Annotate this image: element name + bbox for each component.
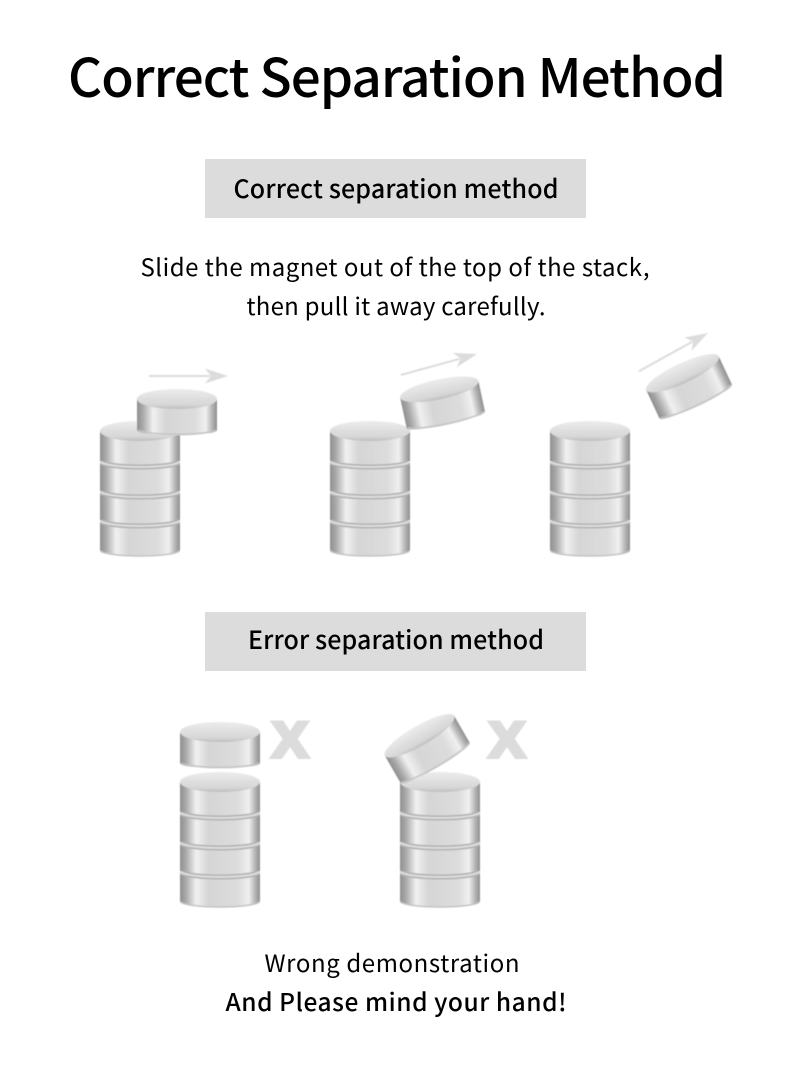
instruction text: then pull it away carefully. xyxy=(246,287,546,322)
error 1: magnet lifted straight up xyxy=(180,712,308,907)
footer text: Wrong demonstration xyxy=(264,944,520,979)
instruction text xyxy=(140,248,650,322)
step 1: stack with magnet sliding xyxy=(100,368,228,556)
footer text: And Please mind your hand! xyxy=(226,984,566,1019)
error 2: magnet pried at an angle: X xyxy=(489,712,525,768)
panel: error separation heading: Error separation method xyxy=(248,621,544,657)
title: Correct Separation Method xyxy=(68,37,726,113)
footer text xyxy=(226,944,566,1019)
instruction text: Slide the magnet out of the top of the stack, xyxy=(140,248,650,283)
panel: error separation heading xyxy=(205,612,586,671)
panel: correct separation heading xyxy=(205,159,586,218)
step 3: magnet pulled away xyxy=(550,326,734,556)
panel: correct separation heading: Correct separation method xyxy=(234,170,558,206)
error 1: magnet lifted straight up: X xyxy=(272,712,308,768)
panel: error method illustrations xyxy=(180,707,525,907)
panel: correct method illustrations xyxy=(100,326,734,556)
error 2: magnet pried at an angle xyxy=(380,707,525,907)
step 2: magnet tilting away xyxy=(330,347,486,556)
